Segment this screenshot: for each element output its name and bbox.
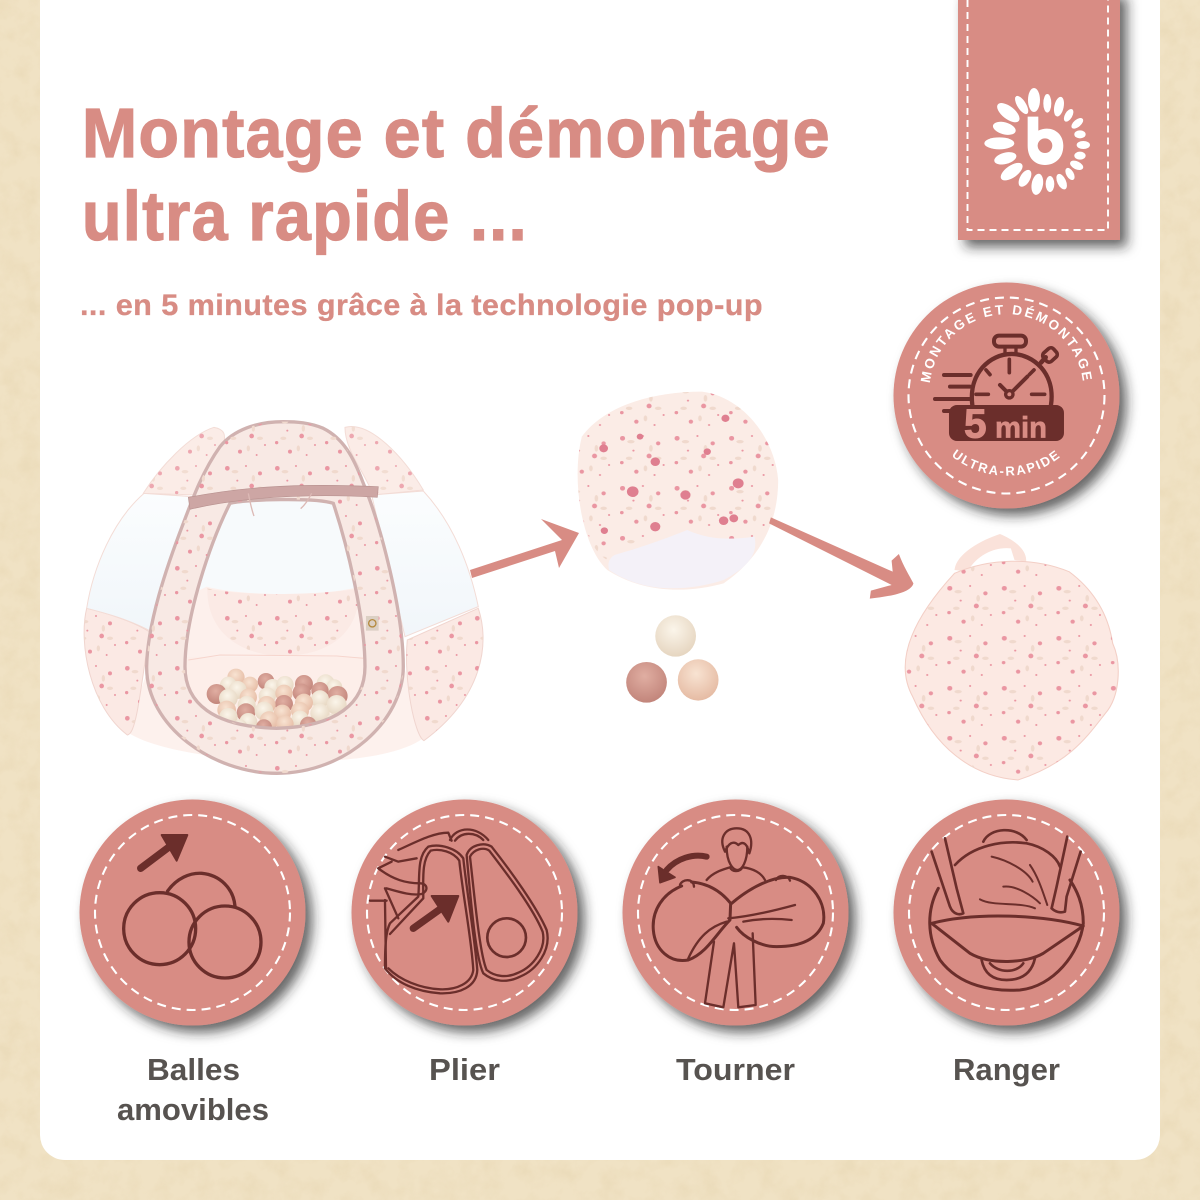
tent right lower panel [406, 608, 483, 741]
title: ultra rapide ... [82, 177, 528, 255]
tent left window [87, 493, 203, 632]
small brand label on tent [366, 616, 379, 631]
tent roll-up bar [188, 485, 378, 516]
tent left upper panel [143, 427, 225, 495]
flower clusters on folded tent [599, 415, 744, 534]
three balls [626, 615, 719, 703]
folded tent photo [578, 392, 778, 590]
step 4: ranger [894, 800, 1120, 1026]
tent right upper panel [345, 427, 423, 495]
icon: person twisting tent [653, 828, 824, 1007]
label: tourner: Tourner [676, 1052, 795, 1087]
tent front opening view [186, 586, 364, 727]
tent floor [127, 663, 423, 762]
packed tent bag photo [905, 534, 1118, 780]
icon: balls and arrow [124, 835, 261, 978]
icon: stopwatch: min [995, 411, 1047, 444]
white inner fabric [608, 530, 755, 588]
label: balles amovibles: amovibles [117, 1092, 269, 1127]
step 2: plier [352, 800, 578, 1026]
icon: stopwatch: 5 [964, 400, 987, 446]
icon: folding tent [370, 829, 548, 993]
label: balles amovibles [117, 1052, 269, 1127]
icon: storing tent in bag [930, 830, 1083, 990]
arrow: folded tent to bag [769, 517, 913, 599]
badge top circular text: MONTAGE ET DÉMONTAGE [920, 305, 1092, 382]
step 3: tourner [622, 800, 848, 1026]
tent right window [372, 491, 478, 637]
step 1: balles amovibles [80, 800, 306, 1026]
brand tag with logo [958, 0, 1120, 240]
title [82, 94, 831, 255]
icon: brand logo flower [984, 88, 1090, 196]
subtitle: ... en 5 minutes grâce à la technologie pop-up [80, 289, 763, 322]
tent left lower panel [84, 608, 149, 735]
tent product photo [84, 422, 483, 773]
badge: 5 min ultra-rapide [891, 280, 1136, 525]
label: plier: Plier [429, 1052, 500, 1087]
icon: stopwatch [935, 336, 1064, 446]
arrow: tent to folded tent [470, 519, 579, 578]
tent front frame [147, 422, 403, 773]
label: ranger: Ranger [953, 1052, 1060, 1087]
ball pit [206, 668, 348, 727]
badge bottom circular text: ULTRA-RAPIDE [953, 449, 1060, 476]
label: balles amovibles: Balles [147, 1052, 240, 1087]
title: Montage et démontage [82, 94, 831, 172]
